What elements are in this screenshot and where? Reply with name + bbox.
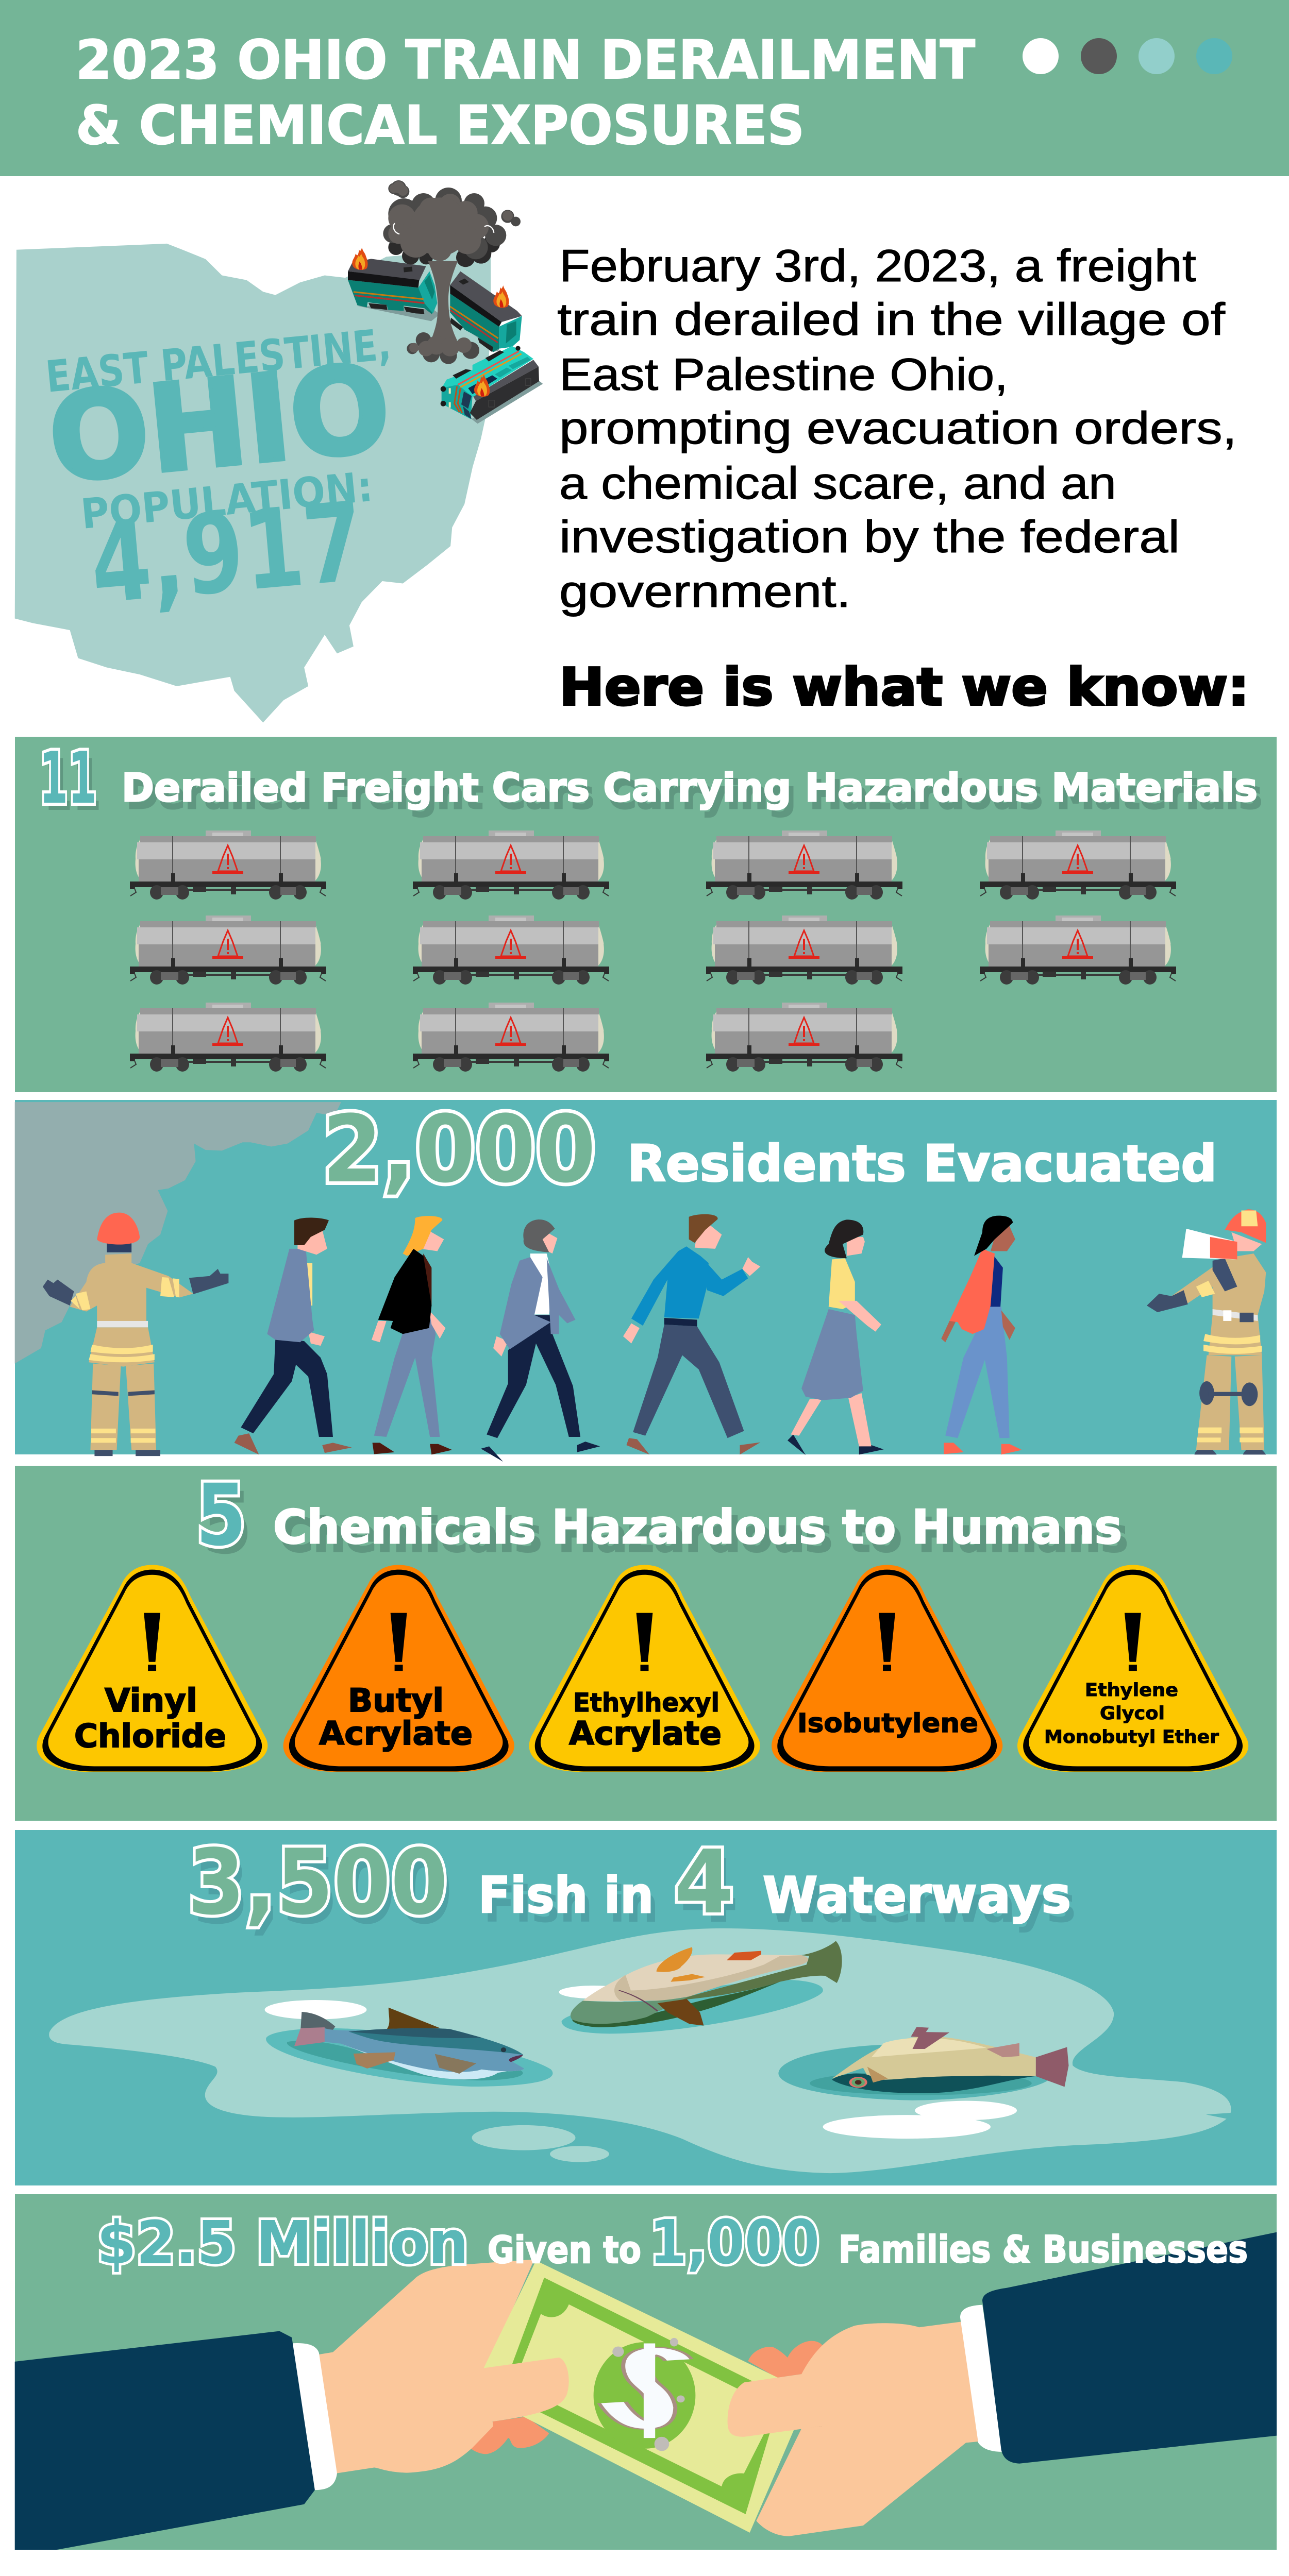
chemical names: Isobutylene xyxy=(797,1708,978,1739)
heading: 2,000 residents: Residents Evacuated xyxy=(627,1134,1217,1193)
heading: 11 derailed cars: Derailed Freight Cars Carrying Hazardous Materials xyxy=(122,765,1258,810)
heading: 5 chemicals xyxy=(196,1466,1128,1573)
heading: 3,500 fish in 4 waterways: Fish in xyxy=(483,1876,659,1934)
heading: 2.5 million to 1000 families: $2.5 Million xyxy=(97,2209,468,2278)
intro paragraph: government. xyxy=(559,566,851,617)
chemical names xyxy=(74,1680,1219,1755)
heading: 3,500 fish in 4 waterways: 3,500 xyxy=(188,1831,448,1935)
evacuee 5 xyxy=(788,1219,884,1455)
panel: derailed freight cars xyxy=(15,737,1277,1092)
chemical names: Chloride xyxy=(74,1717,226,1755)
intro paragraph xyxy=(557,240,1237,617)
intro paragraph: prompting evacuation orders, xyxy=(559,402,1237,453)
heading: 11 derailed cars: 11 xyxy=(39,737,97,820)
train engine toppled xyxy=(441,346,543,423)
chemical names: Monobutyl Ether xyxy=(1044,1727,1219,1748)
evacuee 1 xyxy=(235,1217,352,1454)
fish: green and cream xyxy=(559,1941,842,2033)
heading: 3,500 fish in 4 waterways: Waterways xyxy=(768,1876,1076,1934)
heading: 2.5 million to 1000 families: Families & Businesses xyxy=(839,2228,1248,2271)
heading: 11 derailed cars: 11 xyxy=(44,744,102,827)
panel: residents evacuated xyxy=(15,1096,1277,1462)
intro paragraph: investigation by the federal xyxy=(559,511,1180,562)
chemical names: Ethylene xyxy=(1085,1680,1178,1701)
decorative dots xyxy=(1023,38,1232,74)
sign: isobutylene xyxy=(772,1565,1002,1772)
chemical names: Glycol xyxy=(1100,1703,1165,1724)
contaminated water puddle xyxy=(49,1928,1231,2173)
Ohio map with population text: OHIO xyxy=(43,338,396,510)
heading: 2.5 million to 1000 families xyxy=(97,2207,1248,2278)
heading: 3,500 fish in 4 waterways: Fish in xyxy=(478,1867,654,1924)
illustration: hands exchanging money xyxy=(15,2232,1277,2550)
panel: money given to families xyxy=(15,2194,1277,2550)
people illustrations xyxy=(43,1209,1266,1462)
heading: 2.5 million to 1000 families: 1,000 xyxy=(649,2207,819,2278)
flames xyxy=(352,248,509,397)
heading: 3,500 fish in 4 waterways: Waterways xyxy=(763,1867,1071,1924)
heading: 3,500 fish in 4 waterways xyxy=(188,1831,1076,1944)
Ohio map with population text: POPULATION: xyxy=(79,463,375,538)
chemical names: Acrylate xyxy=(569,1715,722,1752)
heading: 5 chemicals: Chemicals Hazardous to Humans xyxy=(279,1509,1128,1563)
heading: 5 chemicals: Chemicals Hazardous to Humans xyxy=(273,1500,1122,1554)
heading: 5 chemicals: 5 xyxy=(202,1474,253,1573)
heading: 3,500 fish in 4 waterways: 3,500 xyxy=(193,1840,453,1944)
tank cars grid xyxy=(130,831,1176,1072)
sign: vinyl chloride xyxy=(37,1565,267,1772)
chemical names: Vinyl xyxy=(105,1682,197,1719)
heading: 11 derailed cars: Derailed Freight Cars Carrying Hazardous Materials xyxy=(126,772,1262,818)
subheading: here is what we know: Here is what we know: xyxy=(559,657,1249,717)
heading: 3,500 fish in 4 waterways: 4 xyxy=(679,1841,739,1943)
heading: 3,500 fish in 4 waterways: 4 xyxy=(674,1832,734,1934)
heading: 11 derailed cars xyxy=(39,737,1262,827)
intro paragraph: train derailed in the village of xyxy=(557,294,1226,345)
Ohio map with population text: 4,917 xyxy=(86,478,369,629)
header band xyxy=(0,0,1289,176)
title: & CHEMICAL EXPOSURES xyxy=(76,95,805,157)
intro paragraph: East Palestine Ohio, xyxy=(559,349,1008,400)
chemical names: Acrylate xyxy=(319,1715,473,1752)
sign: ethylene glycol monobutyl ether xyxy=(1017,1565,1248,1772)
firefighter left xyxy=(43,1213,228,1456)
evacuee 6 xyxy=(941,1216,1022,1454)
smoke plume xyxy=(383,180,521,364)
Ohio map with population text: EAST PALESTINE, xyxy=(44,319,393,402)
panel: fish in waterways xyxy=(15,1830,1277,2185)
title: 2023 OHIO TRAIN DERAILMENT xyxy=(76,29,975,91)
smoke cloud xyxy=(15,1102,341,1364)
chemical names: Ethylhexyl xyxy=(573,1688,719,1718)
heading: 5 chemicals: 5 xyxy=(196,1466,246,1565)
heading: 2,000 residents xyxy=(322,1096,1217,1204)
intro paragraph: February 3rd, 2023, a freight xyxy=(559,240,1196,291)
sign: ethylhexyl acrylate xyxy=(529,1565,760,1772)
fish: blue xyxy=(266,2008,553,2087)
chemical names: Butyl xyxy=(348,1682,444,1719)
evacuee 4 xyxy=(623,1214,760,1454)
heading: 2.5 million to 1000 families: Given to xyxy=(488,2228,641,2272)
evacuee 2 xyxy=(372,1216,452,1454)
train car left xyxy=(348,259,440,321)
warning signs xyxy=(37,1565,1248,1772)
fish: yellow with teal underside xyxy=(778,2027,1069,2100)
intro paragraph: a chemical scare, and an xyxy=(559,457,1116,509)
sign: butyl acrylate xyxy=(283,1565,514,1772)
title xyxy=(76,29,975,157)
panel: hazardous chemicals xyxy=(15,1466,1277,1821)
heading: 2,000 residents: 2,000 xyxy=(322,1096,596,1204)
evacuee 3 xyxy=(481,1219,600,1462)
firefighter right with megaphone xyxy=(1147,1209,1266,1454)
train wreck illustration with smoke and fire xyxy=(348,180,543,423)
train car right xyxy=(450,272,522,352)
Ohio map with population text xyxy=(15,244,491,722)
